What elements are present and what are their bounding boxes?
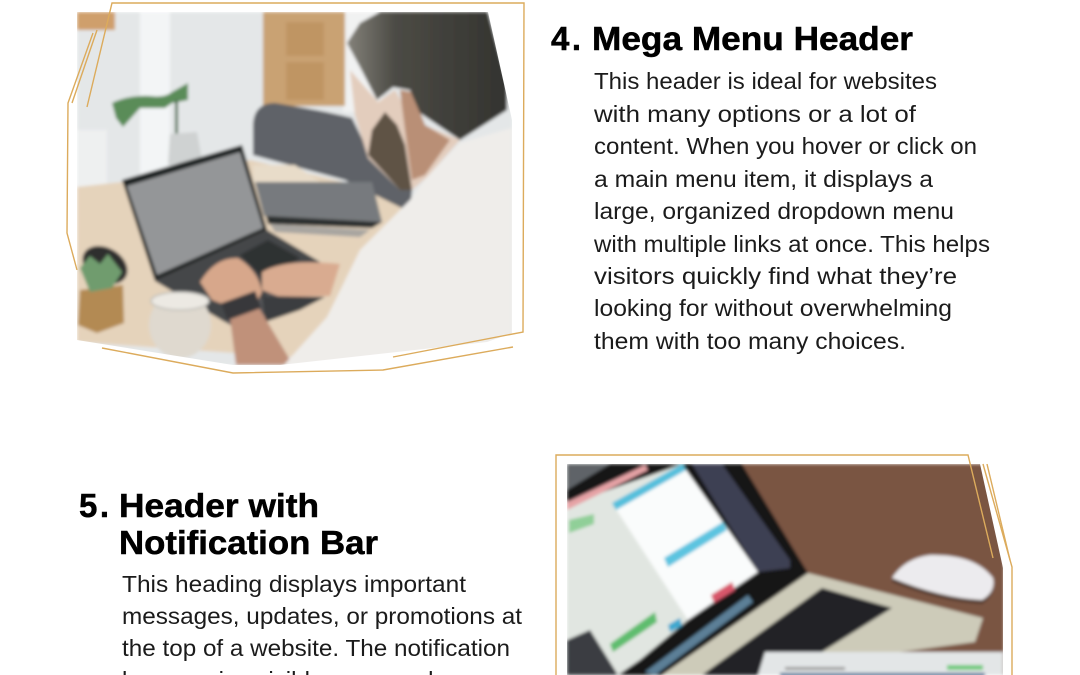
body text: mega menu header: with many options or a lot of xyxy=(593,101,917,127)
body text: mega menu header: with multiple links at once. This helps xyxy=(593,231,990,257)
body text: notification bar header: the top of a website. The notification xyxy=(122,635,510,661)
body text: mega menu header: This header is ideal for websites xyxy=(594,68,937,94)
heading: 4. Mega Menu Header: Mega Menu Header xyxy=(592,20,913,57)
heading: 5. Header with Notification Bar: 5. xyxy=(79,487,109,524)
gold frame lines xyxy=(67,3,524,373)
heading: 5. Header with Notification Bar xyxy=(79,487,378,561)
body text: notification bar header: This heading displays important xyxy=(122,571,467,597)
body text: mega menu header: them with too many choices. xyxy=(594,328,906,354)
body text: mega menu header xyxy=(593,68,990,354)
body text: mega menu header: content. When you hover or click on xyxy=(594,133,977,159)
body text: mega menu header: looking for without overwhelming xyxy=(594,295,952,321)
heading: 4. Mega Menu Header: 4. xyxy=(551,20,581,57)
gold frame lines xyxy=(556,455,1012,675)
body text: mega menu header: visitors quickly find what they’re xyxy=(594,263,957,289)
body text: mega menu header: large, organized dropdown menu xyxy=(594,198,954,224)
heading: 5. Header with Notification Bar: Notification Bar xyxy=(119,524,378,561)
body text: notification bar header: messages, updates, or promotions at xyxy=(122,603,523,629)
photo: laptop and mouse on a desk xyxy=(556,455,1012,675)
body text: notification bar header xyxy=(122,571,523,675)
body text: mega menu header: a main menu item, it displays a xyxy=(594,166,933,192)
photo: man working on a laptop xyxy=(67,3,524,373)
heading: 5. Header with Notification Bar: Header with xyxy=(119,487,319,524)
